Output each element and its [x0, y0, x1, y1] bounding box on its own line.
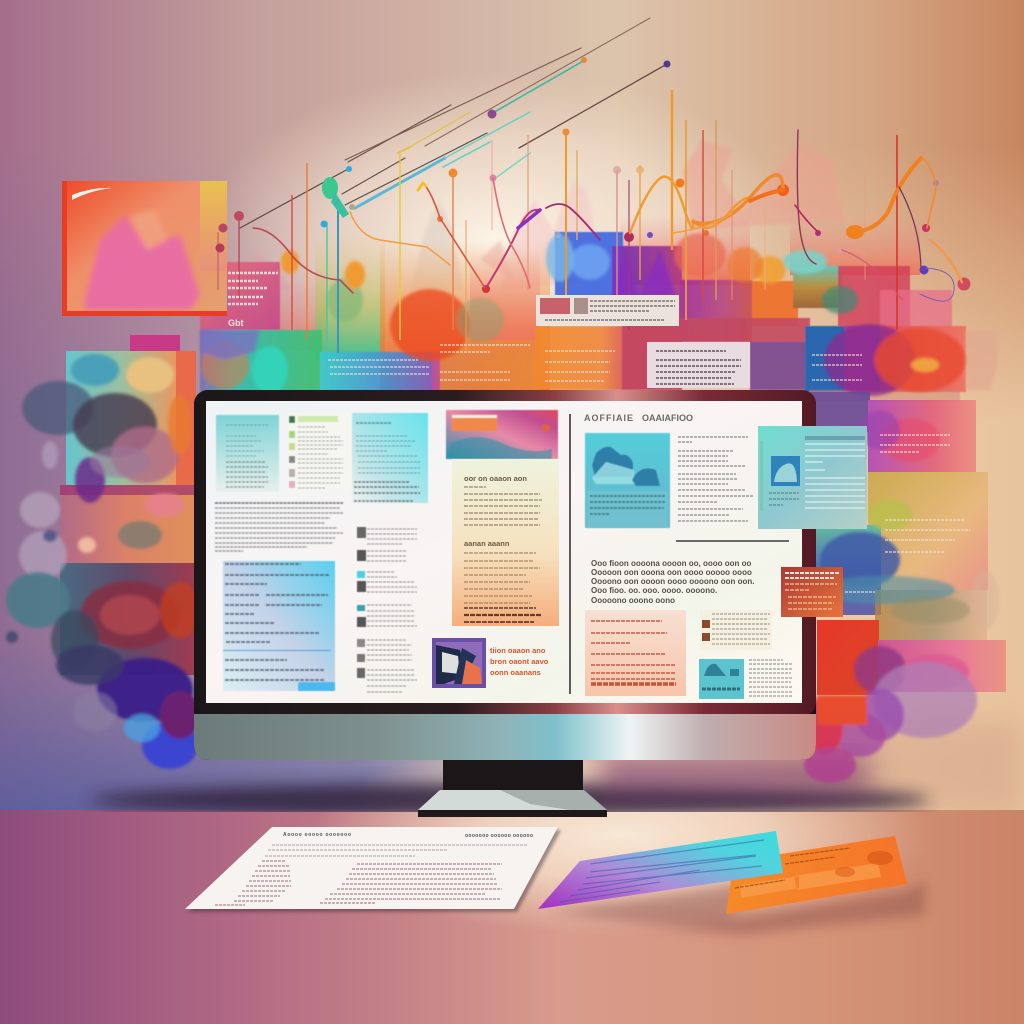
right stack of translucent panels	[804, 392, 1006, 783]
colour band: sharp panels	[200, 232, 966, 402]
doc teal	[216, 415, 279, 492]
teal illustration text	[678, 437, 753, 521]
paragraph	[591, 559, 754, 605]
orange caption: bron oaont aavo	[490, 657, 549, 666]
floor	[0, 735, 1024, 1024]
peach document: aanan aaann	[464, 539, 510, 548]
floating red card	[781, 567, 843, 617]
orange caption	[490, 646, 549, 677]
monitor bezel	[194, 390, 816, 760]
screen: middle column	[432, 410, 571, 694]
list of thumbnails	[357, 527, 417, 692]
colour band: vertical fades	[228, 215, 920, 390]
paper document: Aoooo ooooo ooooooo	[283, 832, 351, 838]
band caption: Gbt	[228, 318, 244, 328]
spike dots	[216, 128, 970, 293]
left stack of translucent panels	[6, 335, 200, 769]
paper document: ooooooo oooooo oooooo	[465, 833, 533, 839]
peach document	[452, 459, 559, 626]
screen: left column	[215, 413, 428, 692]
shadow under cards	[548, 878, 925, 935]
monitor	[194, 390, 816, 817]
screen: right column	[584, 413, 793, 699]
right heading: OAAIAFIOO	[642, 413, 693, 423]
floating document strip: centre	[536, 295, 679, 326]
small list note	[700, 610, 772, 650]
monitor stand	[418, 760, 607, 817]
paragraph: Oooono oon oooon oooo oooono oon oon.	[591, 577, 754, 586]
salmon callout	[585, 610, 686, 696]
paragraph: Ooo fioon oooona oooon oo, oooo oon oo	[591, 559, 752, 568]
orange caption: tiion oaaon ano	[490, 646, 546, 655]
banner	[446, 410, 558, 459]
monitor chin	[194, 714, 816, 760]
small text block	[749, 660, 793, 696]
paper document	[185, 827, 561, 912]
pale silhouettes above the colour band	[240, 140, 916, 320]
right heading	[584, 413, 693, 423]
background	[0, 0, 1024, 810]
light text on colour panels	[328, 345, 970, 592]
small teal image	[699, 659, 744, 699]
paragraph	[215, 502, 343, 504]
peach document: oor on oaaon aon	[464, 474, 527, 483]
rising diagonal lines	[240, 18, 670, 228]
paragraph: Ooooono ooono oono	[591, 596, 675, 605]
photo thumbnail	[432, 638, 486, 688]
colour band: painted blobs	[200, 233, 998, 396]
white greeked rows on band	[228, 273, 278, 304]
card: orange and pink image top left	[62, 181, 227, 316]
paragraph: Ooooon oon ooona oon oooo ooooo oooo	[591, 568, 752, 577]
doc list	[288, 413, 352, 491]
floating glass panel	[758, 426, 867, 529]
teal illustration	[585, 433, 670, 528]
right heading: AOFFIAIE	[584, 413, 633, 423]
orange caption: oonn oaanans	[490, 668, 541, 677]
screen	[206, 401, 802, 703]
shadow band under monitor	[90, 755, 930, 817]
paragraph: Ooo fioo. oo. ooo. oooo. oooono.	[591, 586, 717, 595]
callout box blue	[223, 561, 335, 691]
teal and purple card	[538, 831, 783, 909]
floating document strip: right	[647, 342, 750, 388]
doc cyan	[352, 413, 428, 503]
vertical divider	[569, 414, 571, 694]
wavy lines	[253, 130, 962, 301]
spike chart	[218, 90, 897, 353]
orange card	[726, 836, 907, 914]
rule	[676, 540, 789, 542]
